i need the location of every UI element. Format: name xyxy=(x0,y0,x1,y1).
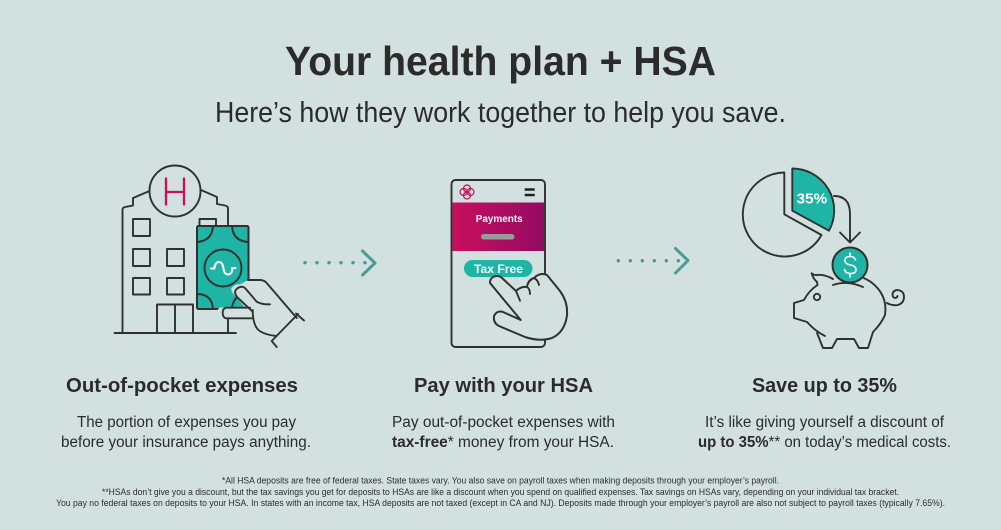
footnotes: *All HSA deposits are free of federal taxes. State taxes vary. You also save on payroll taxes when making deposits through your employer’s payroll. xyxy=(222,476,779,486)
tax free button xyxy=(464,260,532,277)
down arrow xyxy=(834,196,860,242)
arrow: step 2 to step 3 xyxy=(617,248,688,273)
footnotes xyxy=(56,476,945,508)
icon: phone with payment screen xyxy=(452,180,567,347)
heading: pay with your HSA: Pay with your HSA xyxy=(414,374,593,397)
letter H xyxy=(166,178,184,204)
phone body xyxy=(452,180,545,347)
text block: pay with HSA description: Pay out-of-pocket expenses with xyxy=(392,414,615,431)
arrow: step 1 to step 2 xyxy=(303,251,375,275)
footnotes: **HSAs don’t give you a discount, but the tax savings you get for deposits to HSAs are like a discount when you spend on qualified expenses. Tax savings on HSAs vary, depending on your individual tax bracket. xyxy=(102,487,899,497)
pie chart xyxy=(743,172,822,256)
pointing hand xyxy=(490,274,567,340)
icon: pie chart, coin and piggy bank xyxy=(743,168,904,348)
text block: out-of-pocket description xyxy=(61,414,311,451)
text block: out-of-pocket description: The portion of expenses you pay xyxy=(77,414,296,431)
payments banner xyxy=(452,202,544,251)
footnotes: You pay no federal taxes on deposits to your HSA. In states with an income tax, HSA deposits are not taxed (except in CA and NJ). Deposits made through your employer’s payroll are also not subject to payroll taxes (typically 7.65%). xyxy=(56,498,945,508)
piggy bank xyxy=(794,273,904,348)
text block: pay with HSA description xyxy=(392,414,615,451)
heading: save up to 35%: Save up to 35% xyxy=(752,374,897,397)
heading: out-of-pocket expenses: Out-of-pocket expenses xyxy=(66,374,298,397)
payments banner: Payments xyxy=(476,213,523,225)
menu icon xyxy=(525,190,535,195)
text block: save description: It’s like giving yourself a discount of xyxy=(705,414,945,431)
title: Your health plan + HSA xyxy=(285,38,716,84)
subtitle: Here’s how they work together to help you save. xyxy=(215,97,786,129)
hospital building xyxy=(114,166,236,333)
text block: out-of-pocket description: before your insurance pays anything. xyxy=(61,434,311,451)
logo xyxy=(460,185,474,199)
text block: pay with HSA description: tax-free* money from your HSA. xyxy=(392,434,614,451)
35 percent slice xyxy=(792,168,834,231)
icon: hospital with money and hand xyxy=(114,166,304,347)
text block: save description xyxy=(698,414,951,451)
text block: save description: up to 35%** on today’s medical costs. xyxy=(698,434,951,451)
coin xyxy=(832,248,868,282)
35 percent slice: 35% xyxy=(797,190,827,208)
hand holding note xyxy=(217,280,304,347)
tax free button: Tax Free xyxy=(474,262,523,276)
banknote xyxy=(197,226,248,309)
